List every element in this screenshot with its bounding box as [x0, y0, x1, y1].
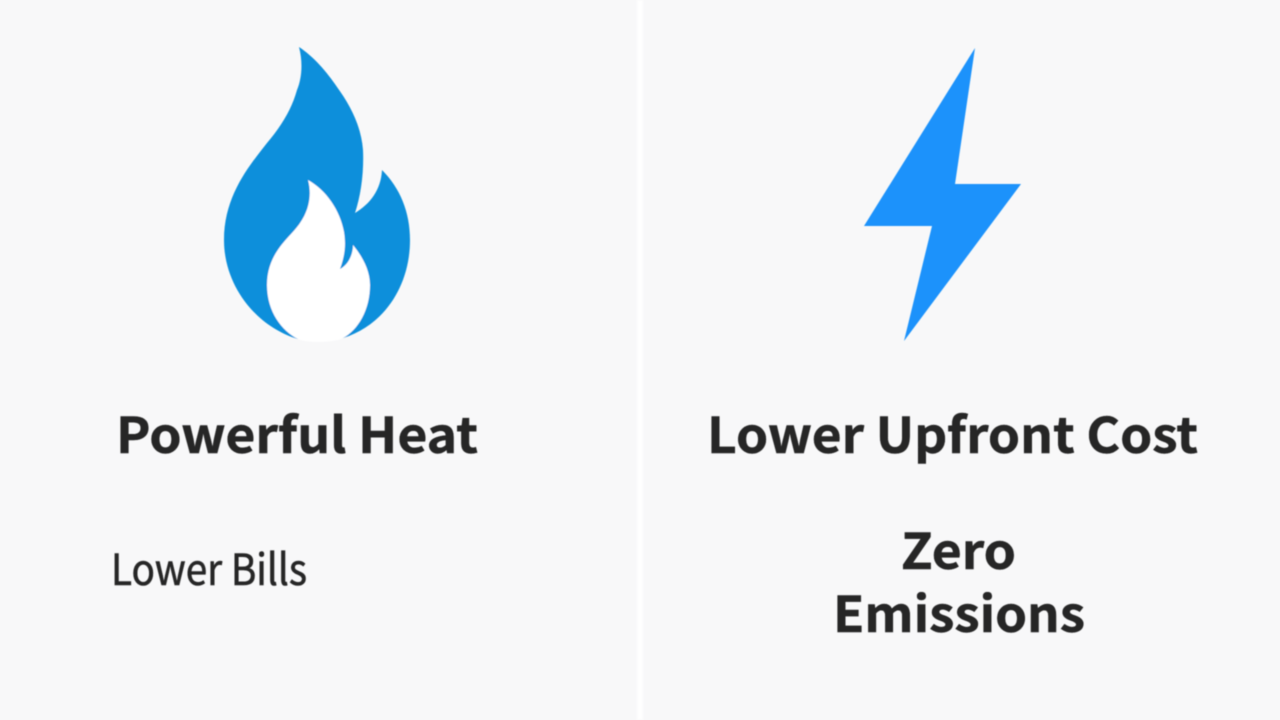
text: Lower Bills: Lower Bills	[111, 536, 307, 598]
heading: Lower Upfront Cost: Lower Upfront Cost	[707, 397, 1198, 468]
panel: electric (right)	[707, 48, 1198, 647]
heading: Zero Emissions: Zero	[901, 513, 1016, 584]
heading: Powerful Heat: Powerful Heat	[116, 397, 478, 468]
icon: lightning bolt	[864, 48, 1021, 341]
panel: gas (left)	[111, 47, 478, 598]
heading: Zero Emissions	[833, 513, 1085, 647]
heading: Zero Emissions: Emissions	[833, 576, 1085, 647]
icon: blue flame	[224, 47, 410, 342]
